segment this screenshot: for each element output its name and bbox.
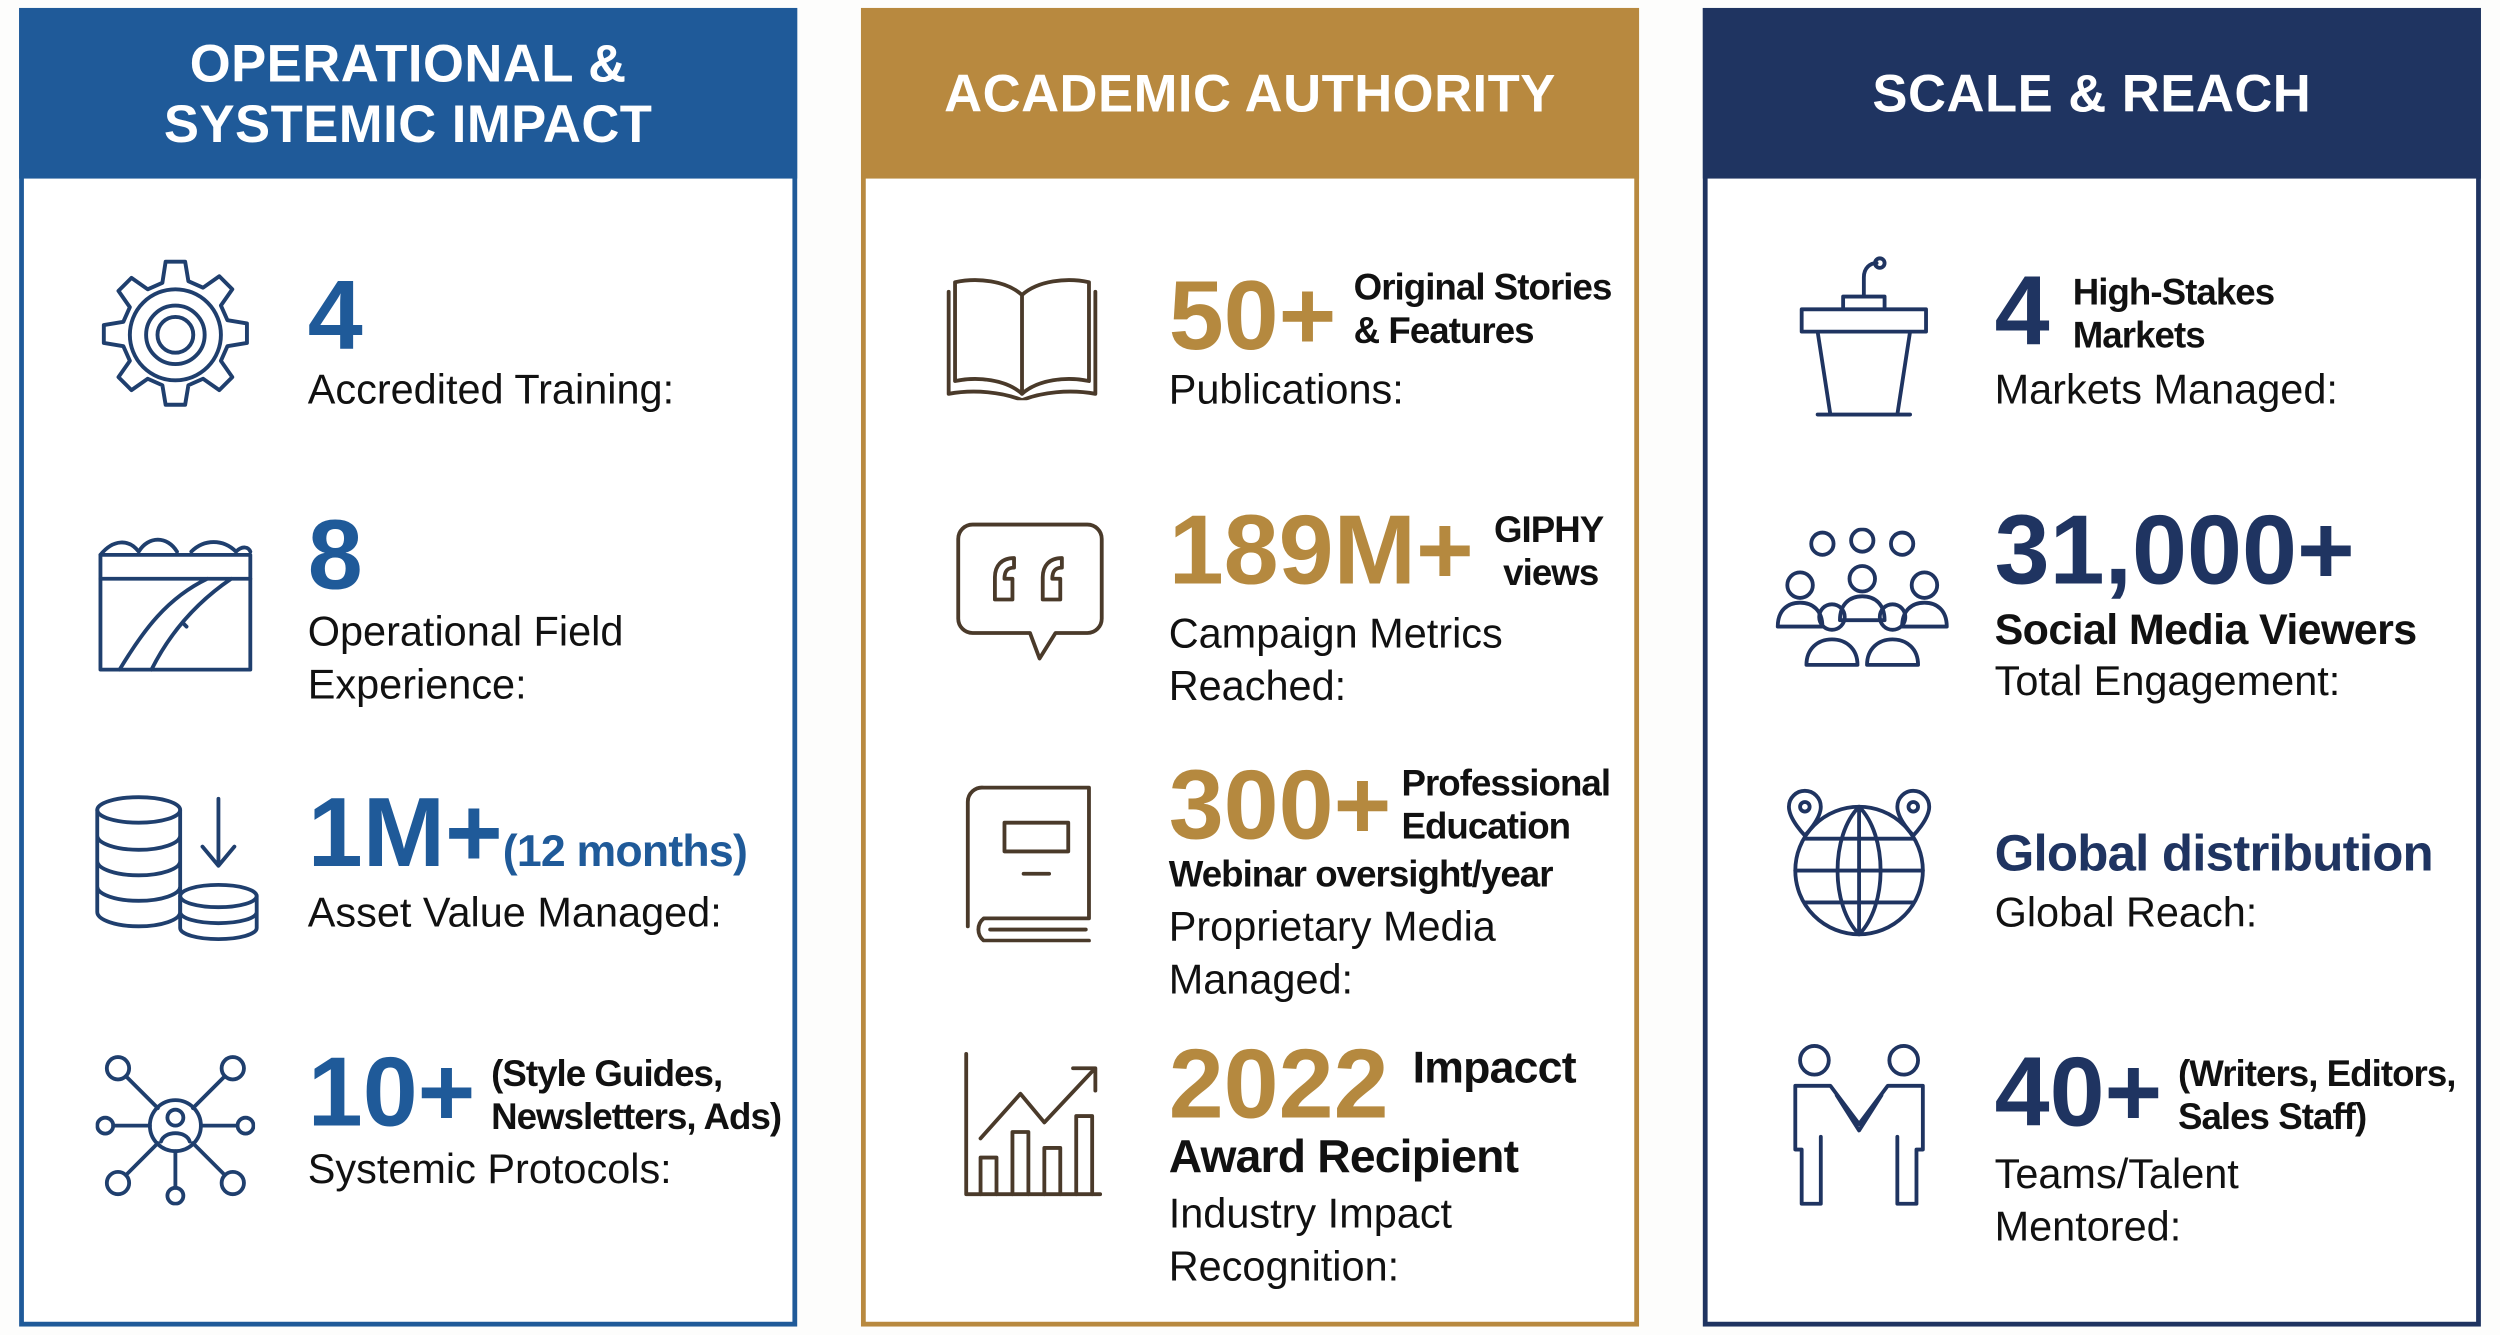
icon: closed book — [966, 786, 1091, 942]
icon: field road — [98, 538, 252, 672]
panel: scale & reach: (Writers, Editors, — [2178, 1052, 2456, 1094]
stat: global distribution: Global distribution — [1995, 824, 2433, 882]
panel: academic authority: Proprietary Media — [1169, 902, 1496, 950]
panel: academic authority: Education — [1401, 805, 1570, 847]
panel: operational & systemic impact: Systemic Protocols: — [308, 1145, 672, 1193]
icon: crowd — [1776, 528, 1949, 667]
panel: academic authority: Industry Impact — [1169, 1189, 1452, 1237]
panel: operational & systemic impact: Asset Value Managed: — [308, 888, 722, 936]
icon: globe — [1787, 788, 1932, 936]
heading: academic: ACADEMIC AUTHORITY — [944, 63, 1556, 122]
panel: scale & reach: Teams/Talent — [1995, 1150, 2239, 1197]
panel: academic authority: GIPHY — [1494, 509, 1603, 550]
panel: operational & systemic impact: Experience: — [308, 660, 527, 708]
icon: growth chart — [964, 1052, 1102, 1196]
panel: scale & reach: Markets Managed: — [1995, 365, 2338, 413]
panel: scale & reach: Sales Staff) — [2178, 1095, 2366, 1137]
panel: operational & systemic impact: Newsletters, Ads) — [491, 1095, 781, 1137]
stat: 8 operational field experience: 8 — [308, 501, 363, 611]
panel: academic authority: Original Stories — [1354, 266, 1611, 308]
panel: academic authority: Webinar oversight/year — [1169, 853, 1553, 894]
panel: academic authority: Reached: — [1169, 662, 1346, 710]
heading: operational: SYSTEMIC IMPACT — [164, 93, 652, 152]
panel: scale & reach: Mentored: — [1995, 1202, 2181, 1250]
panel: scale & reach: Markets — [2073, 314, 2205, 356]
heading: operational: OPERATIONAL & — [190, 33, 627, 92]
panel: academic authority: views — [1503, 552, 1598, 593]
panel: scale & reach: High-Stakes — [2073, 271, 2274, 313]
panel: operational & systemic impact: Accredited Training: — [308, 365, 674, 413]
icon: gear — [102, 260, 249, 407]
stat: 4 markets: 4 — [1995, 257, 2050, 367]
icon: quote bubble — [956, 522, 1104, 660]
heading: scale — [1703, 8, 2481, 179]
stat: 300+ proprietary media: 300+ — [1169, 751, 1391, 861]
icon: network — [96, 1055, 256, 1206]
panel: academic authority: Publications: — [1169, 365, 1404, 413]
panel: academic authority: Recognition: — [1169, 1242, 1399, 1290]
panel: scale & reach — [1703, 8, 2481, 1327]
panel: academic authority: & Features — [1354, 309, 1534, 351]
panel: academic authority: Campaign Metrics — [1169, 609, 1503, 657]
stat: 10+ systemic protocols: 10+ — [308, 1038, 475, 1148]
panel: scale & reach: Social Media Viewers — [1995, 606, 2417, 654]
stat: 31,000+ engagement: 31,000+ — [1995, 496, 2355, 606]
stat: 50+ publications: 50+ — [1169, 261, 1336, 371]
stat: 4 accredited training: 4 — [308, 261, 363, 371]
panel: operational & systemic impact: Operational Field — [308, 607, 623, 655]
panel: scale & reach: Total Engagement: — [1995, 657, 2340, 705]
stat: 40+ teams mentored: 40+ — [1995, 1038, 2162, 1148]
icon: podium — [1800, 256, 1928, 416]
heading: scale: SCALE & REACH — [1872, 63, 2311, 122]
heading: operational — [19, 8, 797, 179]
stat: 1M+ asset value: 1M+(12 months) — [308, 778, 747, 888]
panel: operational & systemic impact — [19, 8, 797, 1327]
icon: open book — [946, 278, 1098, 400]
panel: academic authority: Award Recipient — [1169, 1132, 1518, 1183]
panel: operational & systemic impact: (Style Guides, — [491, 1052, 722, 1094]
heading: academic — [861, 8, 1639, 179]
icon: handshake people — [1793, 1044, 1925, 1206]
panel: scale & reach: Global Reach: — [1995, 888, 2257, 936]
stat: 189M+ campaign metrics: 189M+ — [1169, 496, 1474, 606]
icon: coins — [95, 795, 259, 941]
panel: academic authority: Impacct — [1413, 1043, 1576, 1092]
panel: academic authority: Managed: — [1169, 955, 1353, 1003]
stat: 2022 award: 2022 — [1169, 1030, 1389, 1140]
panel: academic authority — [861, 8, 1639, 1327]
panel: academic authority: Professional — [1401, 762, 1610, 804]
